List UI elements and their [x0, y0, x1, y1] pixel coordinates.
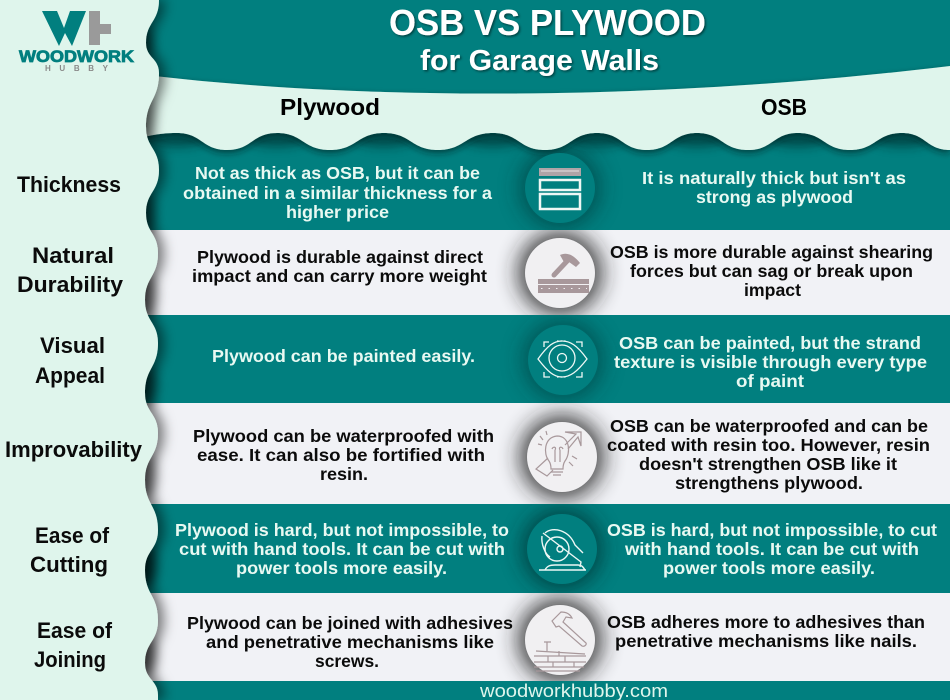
row 3 text: [212, 333, 927, 391]
row 1 text: obtained in a similar thickness for a: [183, 183, 492, 203]
row 4 text: strengthens plywood.: [675, 473, 863, 493]
row 2 text: [192, 242, 933, 300]
left wave shadows: [126, 23, 156, 677]
row labels: Ease of: [35, 523, 110, 548]
row 5 text: power tools more easily.: [236, 558, 447, 578]
row 5 text: with hand tools. It can be cut with: [624, 539, 919, 559]
row 6 text: screws.: [315, 651, 379, 671]
row 6 text: penetrative mechanisms like nails.: [615, 631, 917, 651]
column header strip: [130, 66, 950, 150]
row labels: Visual: [40, 333, 105, 358]
row 4 text: Plywood can be waterproofed with: [193, 426, 494, 446]
row 4 text: resin.: [320, 464, 368, 484]
row 6 text: [187, 612, 925, 671]
row 3 text: OSB can be painted, but the strand: [619, 333, 921, 353]
row labels: Improvability: [5, 437, 143, 462]
row 2 text: OSB is more durable against shearing: [610, 242, 933, 262]
icon halos: [518, 148, 604, 682]
row labels: [5, 172, 143, 672]
row 1 text: Not as thick as OSB, but it can be: [195, 163, 480, 183]
row 3 text: texture is visible through every type: [614, 352, 927, 372]
logo: WOODWORK: [19, 47, 135, 66]
row 4 text: ease. It can also be fortified with: [197, 445, 485, 465]
row bands: [130, 140, 950, 700]
row 2 text: forces but can sag or break upon: [630, 261, 913, 281]
icon: light bulb with arrow: [527, 422, 597, 492]
row 2 text: Plywood is durable against direct: [197, 247, 483, 267]
row 1 text: strong as plywood: [696, 187, 853, 207]
row 5 text: power tools more easily.: [663, 558, 875, 578]
icon: thickness layers: [525, 153, 595, 223]
row 4 text: doesn't strengthen OSB like it: [639, 454, 897, 474]
row 2 text: impact: [744, 280, 801, 300]
left column wavy panel: [0, 0, 159, 700]
row labels: Ease of: [37, 618, 113, 643]
row labels: Appeal: [35, 363, 105, 388]
row 3 text: Plywood can be painted easily.: [212, 346, 475, 366]
row 6 text: and penetrative mechanisms like: [206, 632, 494, 652]
row 5 text: Plywood is hard, but not impossible, to: [175, 520, 509, 540]
title: [389, 2, 706, 77]
logo: HUBBY: [45, 64, 109, 73]
row 6 text: Plywood can be joined with adhesives: [187, 613, 513, 633]
row labels: Joining: [34, 647, 106, 672]
header band: [130, 0, 950, 150]
row 4 text: OSB can be waterproofed and can be: [610, 416, 928, 436]
title: OSB VS PLYWOOD: [389, 2, 706, 43]
row 5 text: OSB is hard, but not impossible, to cut: [607, 520, 937, 540]
wave peak shadows: [147, 131, 932, 147]
row labels: Durability: [17, 272, 124, 297]
row 5 text: [175, 520, 937, 578]
row 3 text: of paint: [736, 371, 804, 391]
row 1 text: It is naturally thick but isn't as: [642, 168, 906, 188]
row labels: Cutting: [30, 552, 108, 577]
row 1 text: [183, 163, 906, 222]
title: for Garage Walls: [420, 45, 659, 77]
row 4 text: coated with resin too. However, resin: [607, 435, 930, 455]
row labels: Natural: [32, 243, 114, 268]
icon: circular saw: [527, 514, 597, 584]
row labels: Thickness: [17, 172, 121, 197]
row 4 text: [193, 416, 930, 493]
row 6 text: OSB adheres more to adhesives than: [607, 612, 925, 632]
icon: hammer and boards: [525, 605, 595, 675]
row 2 text: impact and can carry more weight: [192, 266, 487, 286]
column heading: OSB: OSB: [761, 94, 807, 120]
icon: hammer on board: [525, 238, 595, 308]
logo: [19, 11, 135, 73]
icon: eye: [528, 325, 598, 395]
row 1 text: higher price: [286, 202, 389, 222]
row 5 text: cut with hand tools. It can be cut with: [179, 539, 505, 559]
column heading: Plywood: Plywood: [280, 94, 380, 120]
